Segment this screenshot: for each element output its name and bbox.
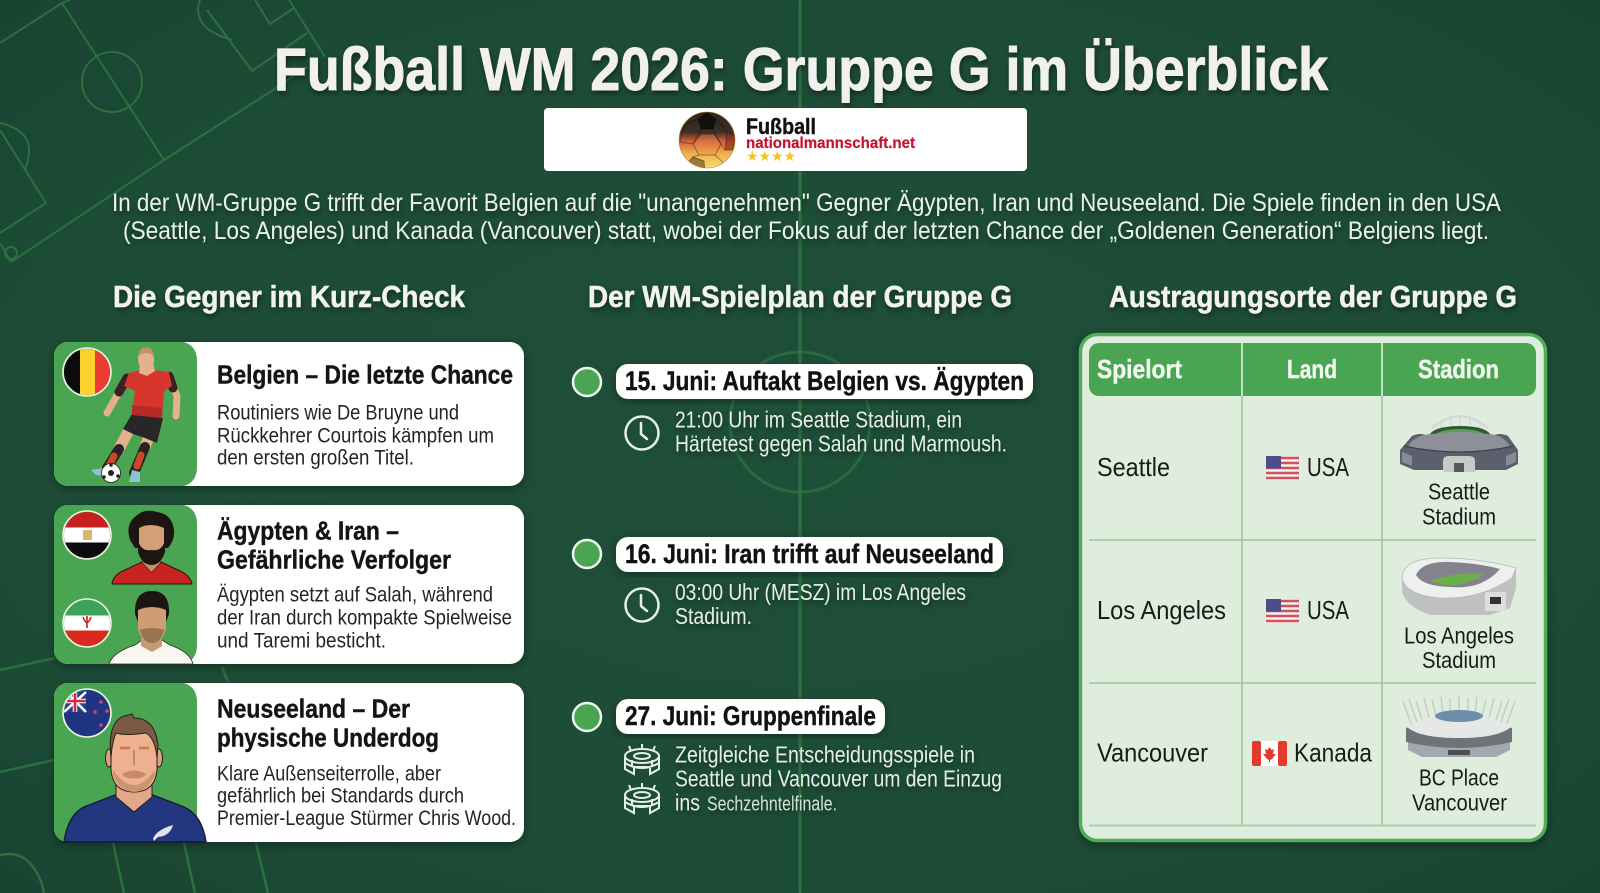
row: Vancouver <box>1097 696 1515 816</box>
table header: Stadion <box>1418 354 1499 384</box>
icon: New Zealand flag <box>63 689 111 737</box>
card title: physische Underdog <box>217 722 439 752</box>
card title: Neuseeland – Der <box>217 694 410 724</box>
card title <box>217 516 451 574</box>
panel: Ägypten und Iran card <box>54 505 524 664</box>
icon: Iran flag <box>63 599 111 647</box>
timeline item: 27. Juni <box>573 699 1002 816</box>
logo banner: nationalmannschaft.net <box>746 135 916 152</box>
card body: Routiniers wie De Bruyne und <box>217 400 459 424</box>
icon: clock <box>626 588 658 622</box>
row: Vancouver: Kanada <box>1294 738 1372 768</box>
heading: Die Gegner im Kurz-Check: Die Gegner im Kurz-Check <box>113 279 466 314</box>
card body: den ersten großen Titel. <box>217 446 414 470</box>
timeline item: 16. Juni: Stadium. <box>675 603 752 629</box>
row: Seattle: Seattle <box>1097 452 1170 482</box>
logo banner <box>544 108 1027 174</box>
card body: der Iran durch kompakte Spielweise <box>217 606 512 630</box>
icon: stadium outline 2 <box>625 783 659 813</box>
timeline item: 15. Juni: 21:00 Uhr im Seattle Stadium, ein <box>675 406 962 432</box>
card body: gefährlich bei Standards durch <box>217 784 464 808</box>
card body: Rückkehrer Courtois kämpfen um <box>217 424 494 448</box>
timeline item: 27. Juni: 27. Juni: Gruppenfinale <box>625 701 876 731</box>
icon: USA flag <box>1266 456 1299 480</box>
card title: Ägypten & Iran – <box>217 516 399 546</box>
row: Los Angeles: Los Angeles <box>1404 622 1514 648</box>
row: Seattle <box>1097 415 1518 530</box>
logo banner: ★★★★ <box>746 149 796 165</box>
logo banner: Fußball <box>746 114 816 139</box>
card body <box>217 762 516 830</box>
row: Vancouver: Vancouver <box>1097 738 1208 768</box>
panel: Neuseeland card <box>54 683 524 842</box>
icon: Salah portrait <box>112 511 192 584</box>
card body: Ägypten setzt auf Salah, während <box>217 582 493 606</box>
timeline item: 27. Juni: Zeitgleiche Entscheidungsspiele in <box>675 742 975 768</box>
table header: Land <box>1287 354 1337 384</box>
card body <box>217 582 512 652</box>
icon: Seattle stadium <box>1400 415 1518 472</box>
card title <box>217 694 439 752</box>
row: Seattle: Seattle <box>1428 478 1490 504</box>
timeline item: 16. Juni: 16. Juni: Iran trifft auf Neuseeland <box>625 539 994 569</box>
icon: USA flag <box>1266 599 1299 623</box>
table header: Spielort <box>1097 354 1182 384</box>
heading: Der WM-Spielplan der Gruppe G: Der WM-Spielplan der Gruppe G <box>588 279 1012 314</box>
timeline item: 15. Juni: 15. Juni: Auftakt Belgien vs. Ägypten <box>625 366 1024 396</box>
timeline item: 27. Juni: Sechzehntelfinale. <box>707 794 837 816</box>
icon: Belgium flag <box>63 348 111 396</box>
icon: Egypt flag <box>63 511 111 559</box>
icon: stadium outline 1 <box>625 744 659 774</box>
icon: BC Place stadium <box>1403 696 1515 757</box>
timeline item: 16. Juni <box>573 537 1003 629</box>
heading: Austragungsorte der Gruppe G: Austragungsorte der Gruppe G <box>1109 279 1517 314</box>
icon: Chris Wood portrait <box>64 714 206 842</box>
row: Seattle: USA <box>1307 452 1350 482</box>
row: Los Angeles: USA <box>1307 595 1350 625</box>
icon: Belgian player <box>91 347 177 482</box>
intro text: (Seattle, Los Angeles) und Kanada (Vancouver) statt, wobei der Fokus auf der letzten Chance der „Goldenen Generation“ Belgiens liegt. <box>123 217 1489 245</box>
card title: Gefährliche Verfolger <box>217 544 451 574</box>
row: Vancouver: Vancouver <box>1412 790 1507 816</box>
table header <box>1089 343 1536 396</box>
timeline item: 16. Juni: 03:00 Uhr (MESZ) im Los Angeles <box>675 579 966 605</box>
row: Los Angeles: Los Angeles <box>1097 595 1226 625</box>
card body <box>217 400 494 470</box>
row: Seattle: Stadium <box>1422 504 1496 530</box>
timeline item: 15. Juni: Härtetest gegen Salah und Marmoush. <box>675 430 1007 456</box>
row: Vancouver: BC Place <box>1419 764 1499 790</box>
timeline item: 15. Juni <box>573 364 1033 456</box>
row: Los Angeles: Stadium <box>1422 647 1496 673</box>
card title: Belgien – Die letzte Chance <box>217 360 513 390</box>
icon: Canada flag <box>1252 741 1287 766</box>
icon: Los Angeles stadium <box>1402 558 1516 615</box>
icon: football logo <box>679 112 735 174</box>
icon: Taremi portrait <box>109 591 193 664</box>
title: Fußball WM 2026: Gruppe G im Überblick <box>274 36 1329 103</box>
card body: Klare Außenseiterrolle, aber <box>217 762 441 786</box>
panel: Belgien card <box>54 342 524 486</box>
row: Los Angeles <box>1097 558 1516 673</box>
timeline item: 27. Juni: ins <box>675 790 700 816</box>
card body: Premier-League Stürmer Chris Wood. <box>217 806 516 830</box>
intro text <box>112 189 1501 245</box>
icon: clock <box>626 416 658 450</box>
timeline item: 27. Juni: Seattle und Vancouver um den Einzug <box>675 766 1002 792</box>
card body: und Taremi besticht. <box>217 628 386 652</box>
panel: venues table <box>1080 334 1546 840</box>
